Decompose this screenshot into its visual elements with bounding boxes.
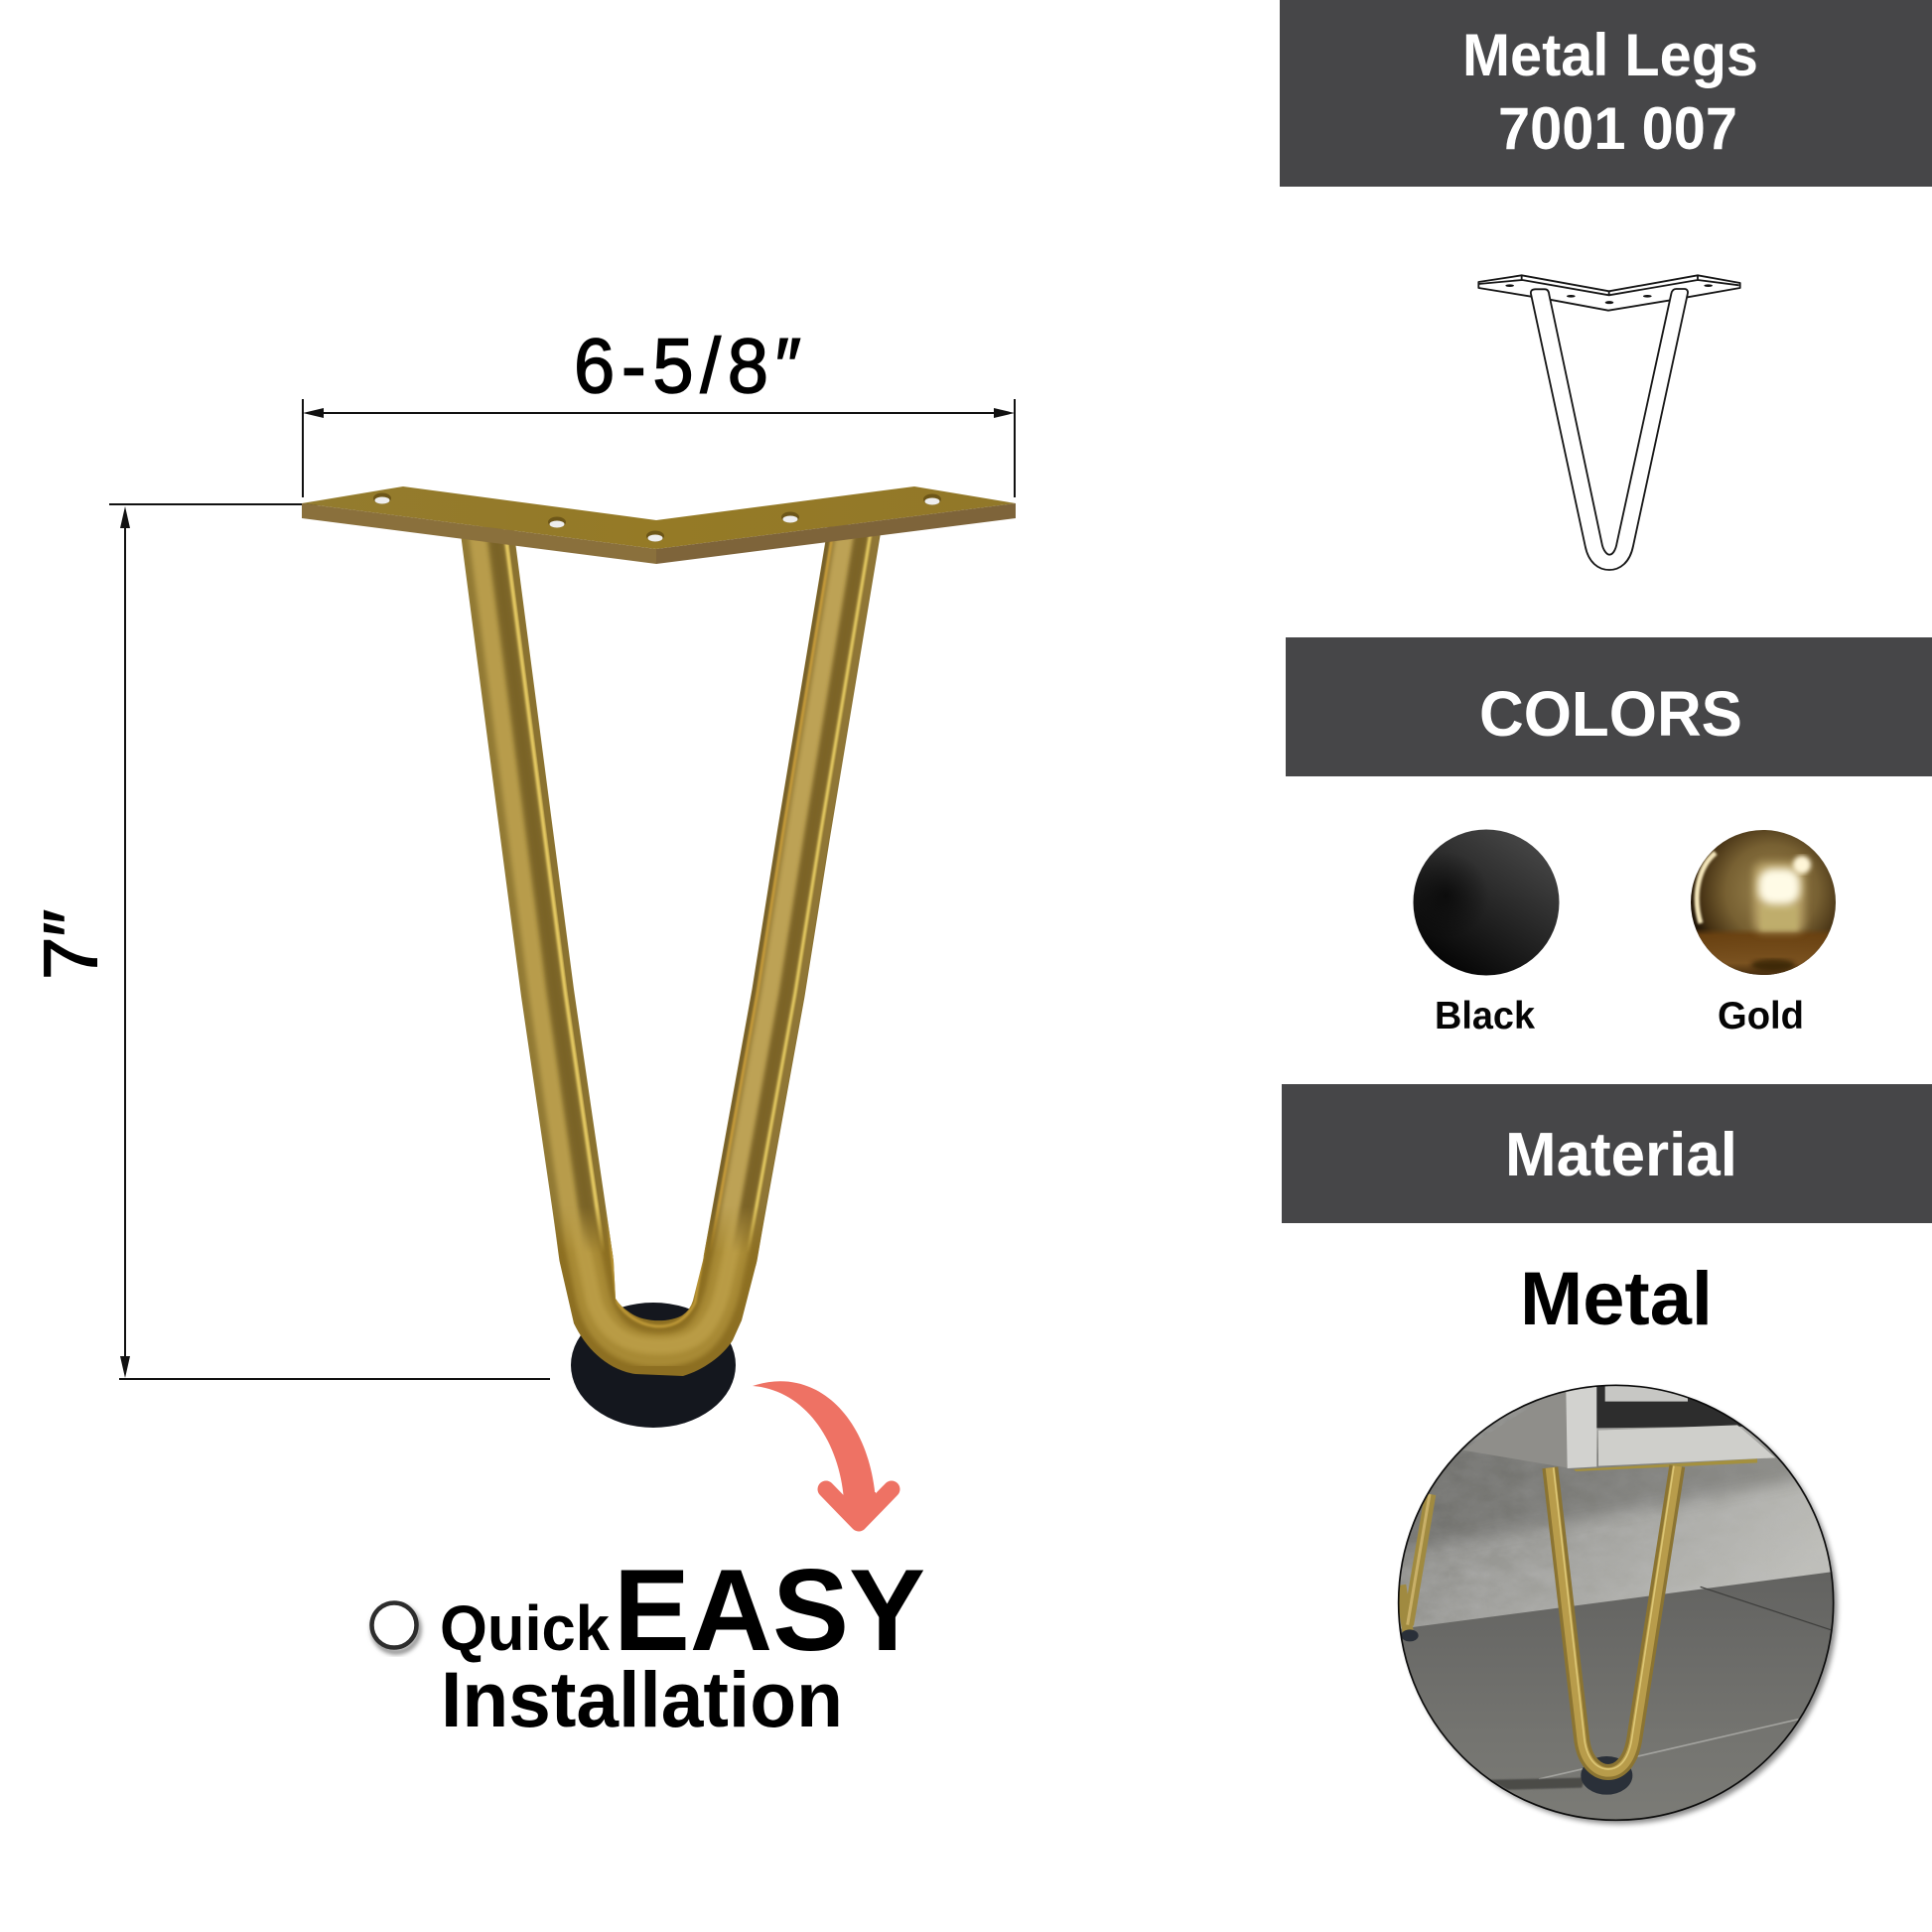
callout: Quick EASY Installation: [371, 1545, 925, 1743]
icon: ring bullet: [371, 1602, 419, 1652]
rubber foot: [571, 1303, 736, 1428]
header: Metal Legs 7001 007: 7001 007: [1498, 95, 1737, 162]
product: gold hairpin leg: [302, 486, 1016, 1428]
callout: Quick EASY Installation: Quick: [440, 1592, 610, 1664]
label: Black: Black: [1435, 995, 1535, 1037]
photo: leg installed on cabinet: [1398, 1384, 1841, 1828]
mounting plate: [302, 486, 1016, 564]
header: COLORS: [1286, 637, 1932, 776]
color swatch: gold: [1688, 830, 1839, 1037]
label: 7 inches: 7″: [29, 909, 113, 980]
material name: Metal: Metal: [1520, 1257, 1713, 1341]
left tube: [477, 526, 610, 1261]
callout: Quick EASY Installation: Installation: [441, 1655, 843, 1743]
header: COLORS: COLORS: [1479, 678, 1742, 750]
tube bend: [552, 1211, 765, 1376]
dimension: height 7: [29, 504, 550, 1379]
callout: Quick EASY Installation: EASY: [614, 1545, 925, 1675]
header: Material: [1282, 1084, 1932, 1223]
label: 6-5/8 inches: 6-5/8″: [574, 323, 801, 409]
color swatch: black: [1414, 830, 1559, 1037]
label: Gold: Gold: [1718, 995, 1804, 1037]
header: Metal Legs 7001 007: Metal Legs: [1462, 22, 1758, 88]
header: Metal Legs 7001 007: [1280, 0, 1932, 187]
icon: leg line drawing: [1478, 275, 1740, 570]
header: Material: Material: [1505, 1121, 1737, 1189]
right tube: [705, 526, 878, 1261]
dimension: width 6-5/8: [303, 323, 1015, 497]
arrow: pointing to installation note: [753, 1381, 892, 1523]
